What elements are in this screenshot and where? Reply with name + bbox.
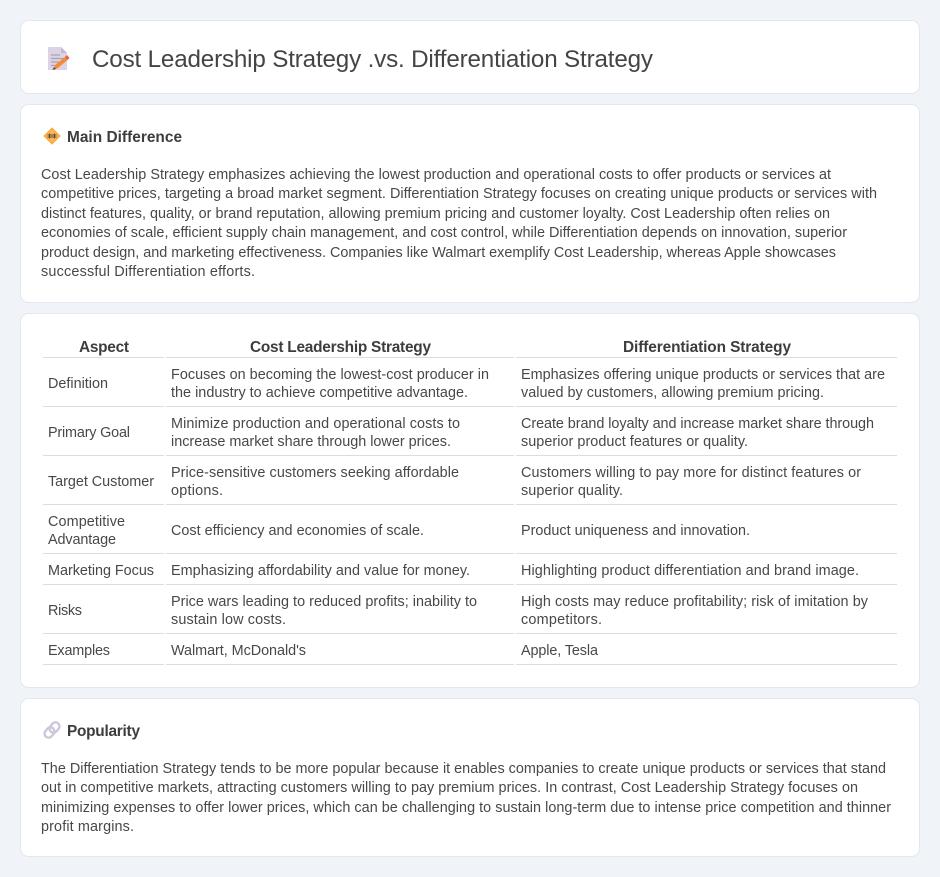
heading: main difference: Main Difference (67, 129, 182, 146)
heading: popularity: Popularity (67, 723, 140, 740)
table row: risks: competitors. (521, 612, 602, 628)
table row: primary goal: superior product features or quality. (521, 434, 748, 450)
table row: competitive advantage: Competitive (48, 514, 125, 530)
table row: definition: Focuses on becoming the lowest-cost producer in (171, 367, 489, 383)
text block: popularity paragraph (41, 761, 891, 835)
table header row: Differentiation Strategy (623, 339, 791, 356)
table row: risks: Price wars leading to reduced profits; inability to (171, 594, 477, 610)
icon: document with pencil (48, 47, 70, 70)
text block: main difference paragraph: distinct features, quality, or brand reputation, allowing premium pricing and customer loyalty. Cost Leadership often relies on (41, 206, 830, 222)
icon: chain link (43, 721, 61, 739)
table row: primary goal (43, 416, 897, 456)
table row: target customer: superior quality. (521, 483, 623, 499)
table row: competitive advantage (43, 514, 897, 554)
text block: popularity paragraph: profit margins. (41, 819, 134, 835)
table row: examples (43, 643, 897, 664)
table header row: Aspect (79, 339, 129, 356)
table row: marketing focus: Marketing Focus (48, 563, 154, 579)
panel: main difference (20, 104, 920, 302)
table row: marketing focus: Emphasizing affordability and value for money. (171, 563, 470, 579)
text block: main difference paragraph: competitive prices, targeting a broad market segment. Differentiation Strategy focuses on creating unique products or services with (41, 186, 877, 202)
table row: primary goal: Primary Goal (48, 425, 130, 441)
table row: target customer (43, 465, 897, 504)
panel: comparison table (20, 314, 920, 688)
table row: risks: sustain low costs. (171, 612, 286, 628)
text block: main difference paragraph: successful Differentiation efforts. (41, 264, 255, 280)
table row: definition: Emphasizes offering unique products or services that are (521, 367, 885, 383)
table row: definition: valued by customers, allowing premium pricing. (521, 385, 824, 401)
table header row (43, 339, 897, 358)
table row: risks: High costs may reduce profitability; risk of imitation by (521, 594, 869, 610)
table row: primary goal: Create brand loyalty and increase market share through (521, 416, 874, 432)
table row: target customer: Customers willing to pay more for distinct features or (521, 465, 861, 481)
table row: primary goal: increase market share through lower prices. (171, 434, 451, 450)
icon: warning diamond (44, 128, 60, 144)
table row: marketing focus: Highlighting product differentiation and brand image. (521, 563, 859, 579)
text block: popularity paragraph: minimizing expenses to offer lower prices, which can be challenging to sustain long-term due to intense price competition and thinner (41, 800, 891, 816)
table row: examples: Examples (48, 643, 110, 659)
table row: examples: Walmart, McDonald's (171, 643, 306, 659)
text block: main difference paragraph: product design, and marketing effectiveness. Companies like Walmart exemplify Cost Leadership, whereas Apple showcases (41, 245, 836, 261)
text block: popularity paragraph: out in competitive markets, attracting customers willing to pay premium prices. In contrast, Cost Leadership Strategy focuses on (41, 780, 858, 796)
table row: competitive advantage: Advantage (48, 532, 116, 548)
text block: main difference paragraph (41, 167, 877, 280)
title: Cost Leadership Strategy .vs. Differentiation Strategy (92, 46, 654, 73)
text block: main difference paragraph: Cost Leadership Strategy emphasizes achieving the lowest production and operational costs to offer products or services at (41, 167, 831, 183)
table row: target customer: options. (171, 483, 223, 499)
table row: competitive advantage: Product uniqueness and innovation. (521, 523, 750, 539)
panel: header (20, 20, 920, 94)
table row: competitive advantage: Cost efficiency and economies of scale. (171, 523, 424, 539)
table row: marketing focus (43, 563, 897, 584)
text block: main difference paragraph: economies of scale, efficient supply chain management, and cost control, while Differentiation depends on innovation, superior (41, 225, 847, 241)
table row: definition: Definition (48, 376, 108, 392)
table header row: Cost Leadership Strategy (250, 339, 431, 356)
table row: definition: the industry to achieve competitive advantage. (171, 385, 468, 401)
text block: popularity paragraph: The Differentiation Strategy tends to be more popular because it enables companies to create unique products or services that stand (41, 761, 886, 777)
table row: target customer: Target Customer (48, 474, 154, 490)
table row: risks: Risks (48, 603, 82, 619)
table row: examples: Apple, Tesla (521, 643, 598, 659)
table row: definition (43, 367, 897, 406)
table row: risks (43, 594, 897, 634)
table row: target customer: Price-sensitive customers seeking affordable (171, 465, 459, 481)
panel: popularity (20, 698, 920, 856)
table row: primary goal: Minimize production and operational costs to (171, 416, 460, 432)
